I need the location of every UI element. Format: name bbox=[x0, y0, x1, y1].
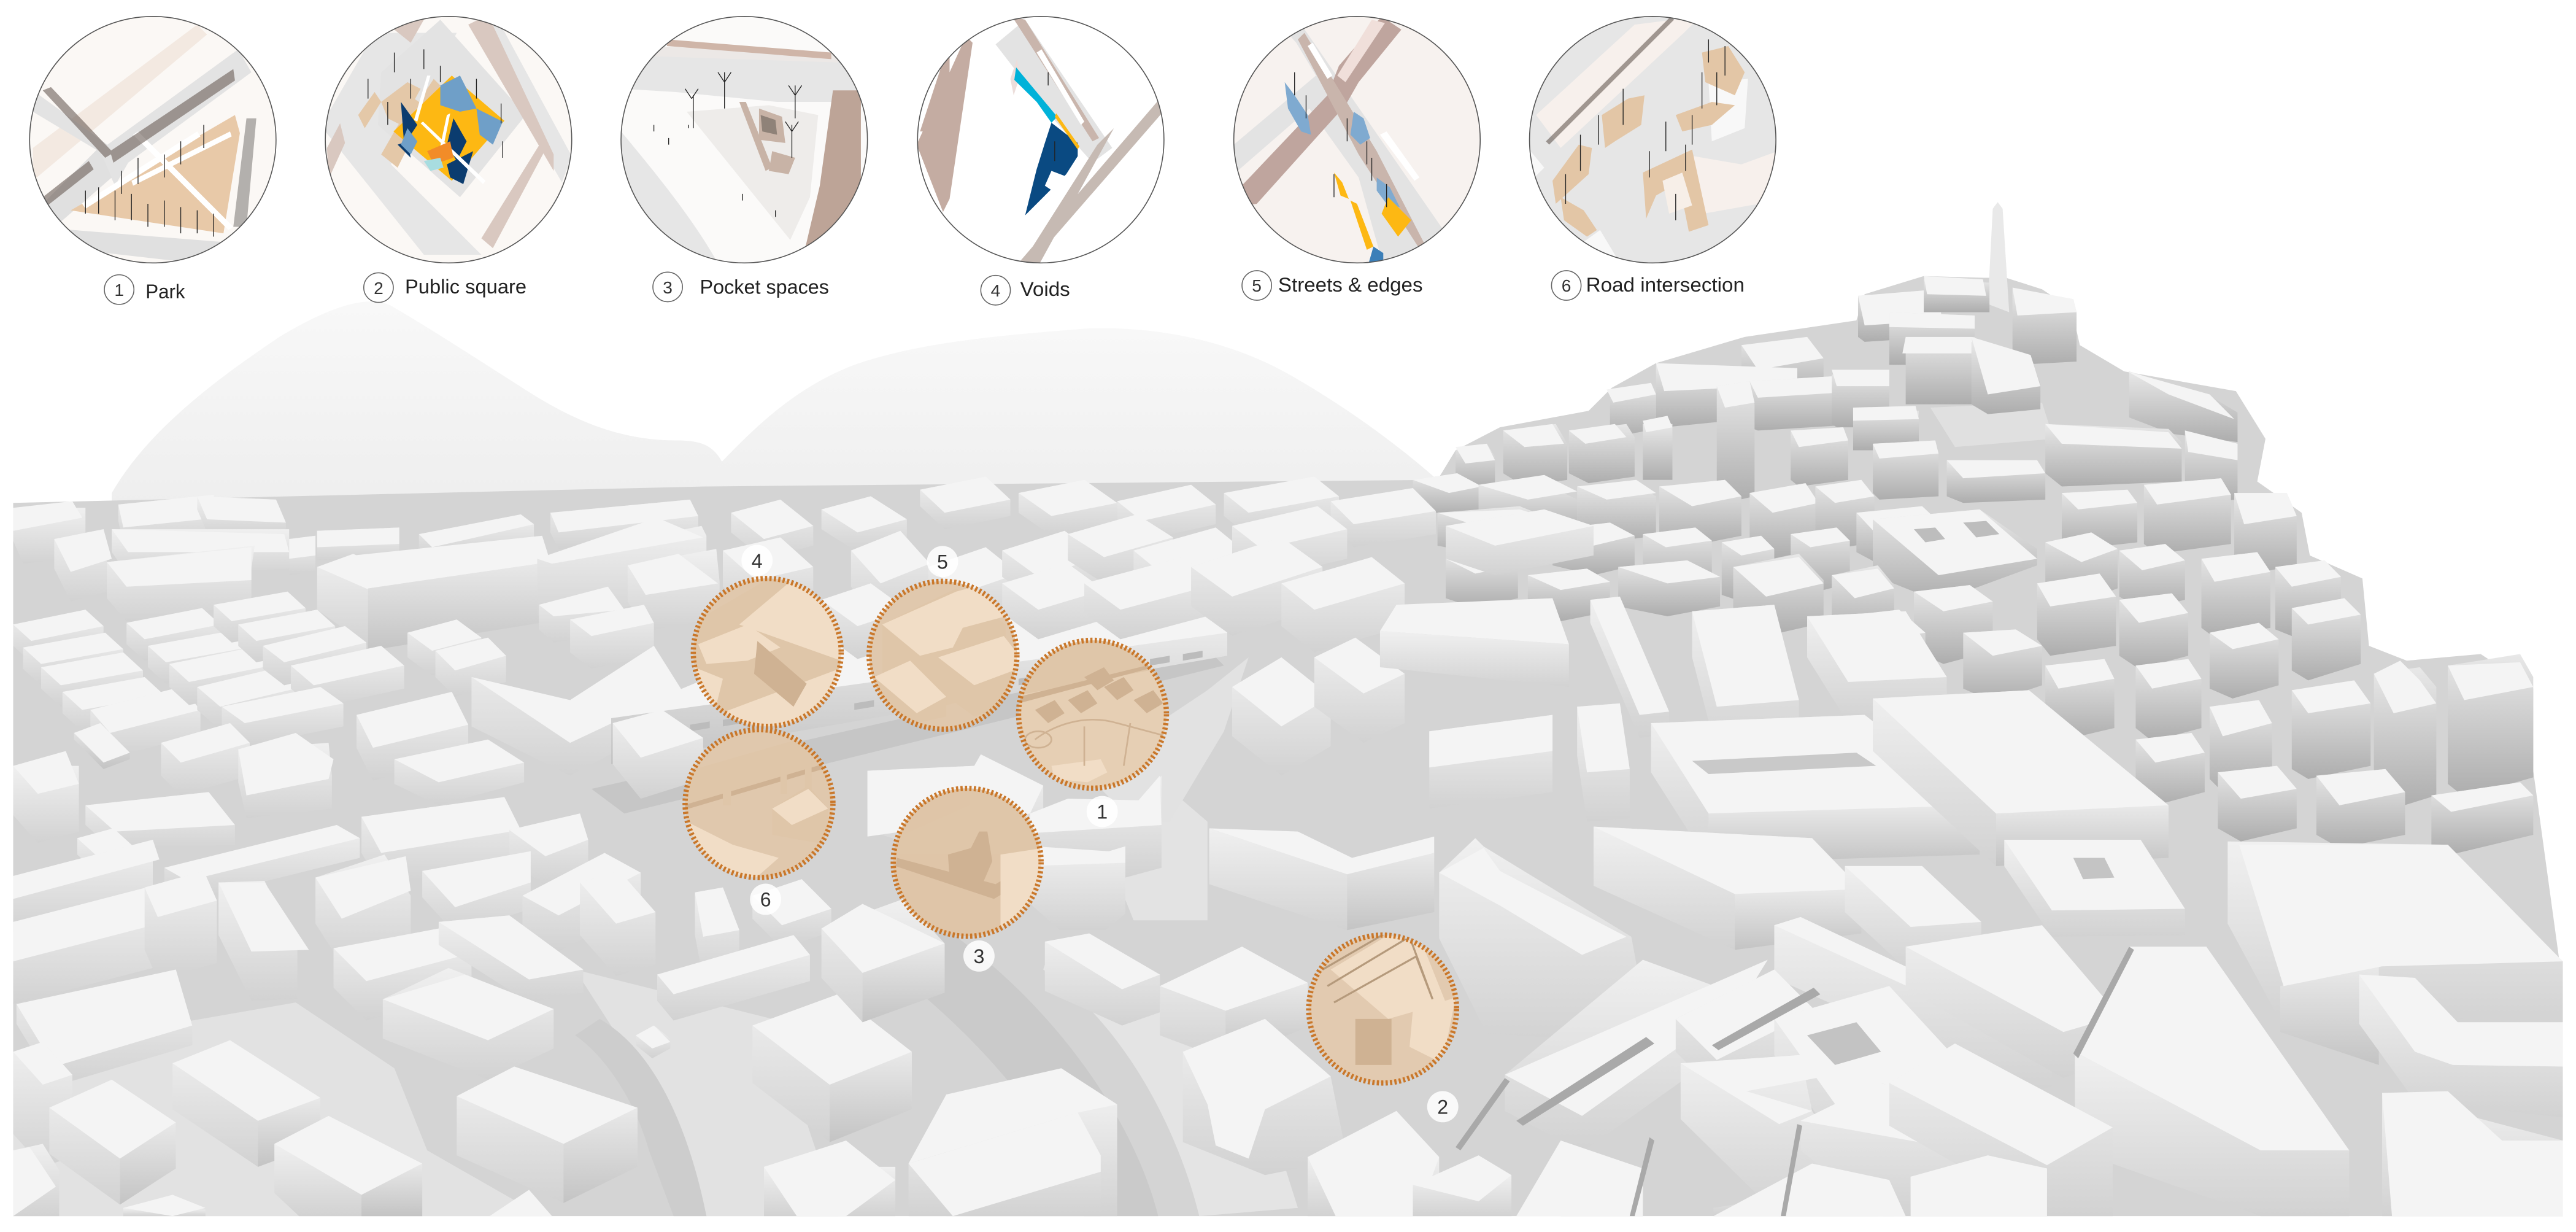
long gallery building with facade bbox=[611, 603, 1227, 799]
map number 6: 6 bbox=[760, 888, 771, 910]
label: park: Park bbox=[145, 281, 185, 303]
highlight circle 3: pocket spaces bbox=[892, 787, 1043, 938]
city ground plane bbox=[13, 276, 2563, 1216]
map number 2 bbox=[1427, 1091, 1459, 1122]
buildings: central plaza and south bbox=[752, 599, 1651, 1216]
map number 5 bbox=[927, 546, 958, 577]
map number 3 bbox=[963, 940, 995, 972]
label: public square bbox=[364, 273, 526, 303]
buildings: hill district, upper bbox=[1456, 276, 2237, 503]
highlight circle 2: public square bbox=[1308, 935, 1457, 1083]
inset 6: road intersection bbox=[1528, 17, 1778, 263]
tower on the hill bbox=[1988, 202, 2009, 312]
map number 1: 1 bbox=[1097, 800, 1108, 823]
buildings: east blocks bbox=[1505, 597, 2563, 1216]
map number 5: 5 bbox=[937, 551, 948, 573]
label: pocket spaces: 3 bbox=[663, 278, 673, 297]
label: park: 1 bbox=[114, 281, 124, 300]
label: road intersection: 6 bbox=[1562, 276, 1571, 295]
dashed orange rings bbox=[685, 578, 1457, 1083]
label: voids bbox=[981, 276, 1070, 305]
inset 2: public square bbox=[325, 15, 572, 263]
highlight circle 5: streets and edges bbox=[868, 579, 1027, 731]
map number 2: 2 bbox=[1437, 1096, 1448, 1118]
inset 5: streets and edges bbox=[1232, 10, 1482, 282]
inset 1: park bbox=[26, 17, 276, 266]
label: voids: 4 bbox=[991, 281, 1000, 300]
dark alleys between the south-east blocks bbox=[1456, 947, 2134, 1216]
buildings: hill district, lower bbox=[1413, 473, 2533, 854]
label: road intersection bbox=[1551, 271, 1745, 300]
label: voids: Voids bbox=[1020, 278, 1070, 300]
map number 4: 4 bbox=[752, 550, 763, 572]
buildings: west back row bbox=[13, 495, 720, 651]
ground patches and roads bbox=[13, 403, 2054, 1216]
label: public square: 2 bbox=[374, 279, 384, 298]
inset 3: pocket spaces bbox=[621, 17, 868, 266]
map number 1 bbox=[1087, 796, 1118, 827]
highlight circle 6: road intersection bbox=[684, 728, 839, 881]
label: park bbox=[104, 275, 185, 304]
label: pocket spaces bbox=[653, 272, 829, 302]
label: streets and edges: Streets & edges bbox=[1278, 274, 1423, 296]
map number 3: 3 bbox=[973, 945, 984, 967]
label: public square: Public square bbox=[405, 276, 526, 298]
inset 4: voids bbox=[917, 17, 1167, 266]
background mountains bbox=[112, 301, 1438, 513]
highlight circle 1: park bbox=[1019, 640, 1167, 788]
buildings: west row houses bbox=[13, 587, 682, 932]
label: streets and edges: 5 bbox=[1252, 276, 1262, 295]
label: road intersection: Road intersection bbox=[1586, 274, 1745, 296]
label: pocket spaces: Pocket spaces bbox=[700, 276, 829, 298]
buildings: central north bbox=[723, 476, 1594, 659]
label: streets and edges bbox=[1242, 271, 1423, 300]
map number 6 bbox=[750, 884, 781, 915]
buildings: west middle bbox=[13, 851, 831, 1216]
highlight circle 4: voids bbox=[693, 578, 841, 727]
map number 4 bbox=[741, 544, 773, 576]
